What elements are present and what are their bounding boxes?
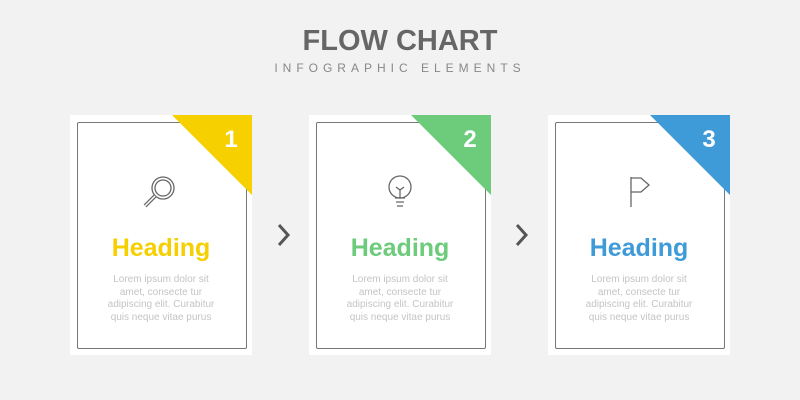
corner badge 1: 1 xyxy=(224,126,238,153)
heading 3: Heading xyxy=(590,234,688,262)
icon: magnifier xyxy=(144,176,175,208)
panel: step 2 xyxy=(309,115,491,355)
arrow 2 xyxy=(516,224,528,246)
text 2 xyxy=(347,274,454,322)
title: FLOW CHART xyxy=(303,25,497,57)
corner badge 2 xyxy=(411,115,491,195)
text 3: quis neque vitae purus xyxy=(589,312,689,322)
heading 2: Heading xyxy=(351,234,449,262)
text 3: Lorem ipsum dolor sit xyxy=(591,274,687,285)
arrow 1 xyxy=(278,224,290,246)
heading 1: Heading xyxy=(112,234,210,262)
text 3: amet, consecte tur xyxy=(598,286,680,298)
subtitle: INFOGRAPHIC ELEMENTS xyxy=(274,61,526,75)
panel: step 1 xyxy=(70,115,252,355)
text 1: quis neque vitae purus xyxy=(111,312,211,322)
icon: bulb xyxy=(388,175,412,207)
text 1 xyxy=(108,274,214,322)
text 1: Lorem ipsum dolor sit xyxy=(113,274,209,285)
corner badge 2: 2 xyxy=(463,126,477,153)
text 1: adipiscing elit. Curabitur xyxy=(108,299,214,310)
text 2: quis neque vitae purus xyxy=(350,312,450,322)
icon: flag xyxy=(630,177,650,207)
corner badge 3: 3 xyxy=(702,126,716,153)
text 2: amet, consecte tur xyxy=(359,286,441,298)
text 3 xyxy=(586,274,692,322)
corner badge 3 xyxy=(650,115,730,195)
text 2: Lorem ipsum dolor sit xyxy=(352,274,448,285)
text 2: adipiscing elit. Curabitur xyxy=(347,299,453,310)
corner badge 1 xyxy=(172,115,252,195)
panel: step 3 xyxy=(548,115,730,355)
text 1: amet, consecte tur xyxy=(120,286,202,298)
text 3: adipiscing elit. Curabitur xyxy=(586,299,692,310)
